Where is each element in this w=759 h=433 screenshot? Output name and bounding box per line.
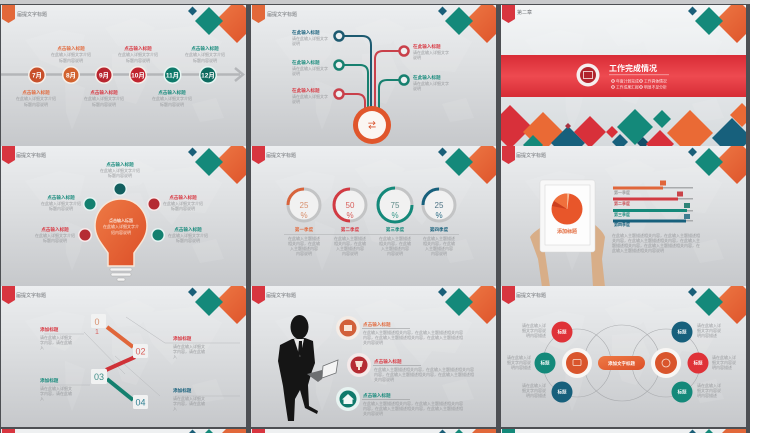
node text: 请在此输入详	[507, 354, 531, 360]
icon labels: 点击输入标题	[47, 194, 75, 201]
step labels: 请在此输入详细文	[40, 334, 72, 340]
step numbers: 04	[135, 398, 146, 408]
month nodes: 12月	[201, 72, 215, 80]
month nodes: 8月	[66, 72, 76, 80]
description: 题描述相关内容，在此输入主题描述相关内容，在	[612, 242, 700, 248]
branch labels: 请在此输入详细文字	[292, 65, 328, 71]
step labels: 请在此输入详细文	[173, 343, 205, 349]
bar labels: 第四季度	[614, 221, 630, 227]
percentages: 25	[300, 201, 309, 210]
step numbers: 1	[95, 329, 99, 336]
slide title: 届提文字标题	[17, 11, 47, 18]
heading rule	[609, 74, 669, 76]
bulb text: 绍内容说明	[111, 229, 131, 235]
cropped bottom row slide 1	[1, 429, 246, 433]
section bullets: 年度计划完成	[616, 78, 639, 84]
icon labels: 在此输入详细文字介绍	[100, 167, 140, 173]
icon labels: 点击输入标题	[174, 226, 202, 233]
branch labels: 在此输入标题	[292, 59, 320, 66]
progress bars	[613, 186, 693, 222]
step numbers: 02	[135, 346, 146, 356]
timeline arrow	[1, 68, 243, 81]
ribbons	[106, 327, 135, 400]
slide 2: branching tree	[251, 0, 509, 146]
icon labels: 在此输入详细文字介绍	[35, 232, 75, 238]
step labels: 入	[40, 345, 44, 350]
description: 关内容，在此输入主题描述相关内容，在此输入主	[612, 237, 700, 243]
light bulb	[95, 199, 147, 281]
icon labels: 标题内容说明	[49, 205, 73, 211]
header badge	[2, 146, 15, 164]
quarter text: 入主题描述内容	[425, 245, 453, 251]
icon labels: 点击输入标题	[41, 226, 69, 233]
branch labels: 请在此输入详细文字	[413, 49, 449, 55]
node text: 请在此输入详	[522, 382, 546, 388]
bulb text: 点击输入标题	[109, 217, 133, 223]
slide 7: zigzag steps	[1, 280, 259, 427]
timeline labels: 点击输入标题	[22, 89, 50, 96]
icon labels	[35, 161, 208, 243]
quarter headings: 第二季度	[341, 226, 360, 233]
slide 5: quarterly rings	[251, 140, 509, 287]
heading rule	[284, 234, 459, 235]
node text: 请在此输入详	[712, 354, 736, 360]
businessman silhouette	[278, 315, 338, 421]
cropped bottom row slide 2	[251, 429, 496, 433]
header badge	[252, 286, 265, 304]
bar labels	[614, 189, 630, 227]
bar labels: 第一季度	[614, 189, 630, 195]
header badge	[252, 146, 265, 164]
timeline labels: 标题内容说明	[24, 101, 48, 107]
slide 3: section divider	[501, 5, 746, 146]
orbit rings	[543, 325, 700, 401]
node text	[507, 322, 736, 398]
item text: 点击输入标题	[374, 358, 402, 365]
bar labels: 第三季度	[614, 211, 630, 217]
description: 在此输入主题描述相关内容，在此输入主题描述相	[612, 232, 700, 238]
timeline labels	[16, 45, 225, 107]
progress rings	[288, 188, 455, 222]
month nodes	[28, 66, 217, 84]
slide title: 届提文字标题	[16, 152, 46, 159]
node text: 明内容描述	[526, 332, 546, 338]
timeline labels: 标题内容说明	[193, 57, 217, 63]
quarter text: 在此输入主题描述	[379, 235, 411, 241]
item text: 关内容说明	[363, 339, 383, 345]
bar value tags	[660, 180, 690, 219]
percentages: 50	[346, 201, 355, 210]
timeline labels: 在此输入详细文字介绍	[185, 51, 225, 57]
item text: 内容，在此输入主题描述相关内容，在此输入主题描述相	[363, 405, 463, 411]
percentages: 25	[435, 201, 444, 210]
branch labels: 在此输入标题	[292, 87, 320, 94]
connector lines	[40, 317, 240, 396]
node text: 细文字内容说	[697, 387, 721, 393]
branch nodes	[334, 32, 408, 98]
inner hubs	[562, 348, 681, 378]
step labels: 字内容，请在此输	[40, 339, 72, 345]
quarter text: 在此输入主题描述	[334, 235, 366, 241]
slide 8: businessman	[251, 280, 509, 427]
branch lines	[344, 35, 398, 108]
node text: 请在此输入详	[697, 322, 721, 328]
branch labels: 请在此输入详细文字	[413, 80, 449, 86]
icon labels: 在此输入详细文字介绍	[168, 232, 208, 238]
timeline labels: 在此输入详细文字介绍	[118, 51, 158, 57]
bottom diamond pattern	[501, 103, 746, 146]
item text	[362, 321, 474, 416]
icon labels: 标题内容说明	[108, 172, 132, 178]
percentages: %	[435, 211, 443, 220]
header badge	[2, 286, 15, 304]
item text: 关内容说明	[374, 376, 394, 382]
node text: 请在此输入详	[697, 382, 721, 388]
step labels: 字内容，请在此输	[173, 348, 205, 354]
icon labels: 在此输入详细文字介绍	[163, 200, 203, 206]
timeline labels: 点击输入标题	[57, 45, 85, 52]
slide title: 届提文字标题	[266, 292, 296, 299]
branch labels: 在此输入标题	[292, 29, 320, 36]
branch labels: 说明	[292, 40, 300, 46]
branch labels: 说明	[292, 98, 300, 104]
icon labels: 在此输入详细文字介绍	[41, 200, 81, 206]
icon badges	[336, 316, 371, 411]
step labels	[40, 326, 205, 411]
slide title: 届提文字标题	[516, 292, 546, 299]
percentages: %	[300, 211, 308, 220]
branch labels: 请在此输入详细文字	[292, 35, 328, 41]
quarter headings: 第四季度	[430, 226, 449, 233]
item text: 点击输入标题	[363, 392, 391, 399]
section icon	[576, 64, 600, 86]
item text: 关内容说明	[363, 410, 383, 416]
cropped bottom row slide 3	[501, 429, 746, 433]
timeline labels: 在此输入详细文字介绍	[16, 95, 56, 101]
month nodes: 9月	[99, 72, 109, 80]
tablet	[540, 180, 595, 252]
quarter text: 内容说明	[387, 250, 403, 256]
outer nodes: 标题	[678, 328, 687, 336]
timeline labels: 点击输入标题	[158, 89, 186, 96]
bulb text	[103, 217, 139, 235]
percentages: %	[346, 211, 354, 220]
icon labels: 标题内容说明	[171, 205, 195, 211]
quarter text: 入主题描述内容	[290, 245, 318, 251]
node text: 细文字内容说	[507, 359, 531, 365]
section bullets: 工作成果汇报	[616, 84, 639, 90]
timeline labels: 点击输入标题	[191, 45, 219, 52]
item text: 点击输入标题	[363, 321, 391, 328]
outer nodes: 标题	[678, 388, 687, 396]
step labels: 入	[173, 354, 177, 359]
slide 1: timeline	[1, 0, 259, 146]
step labels: 添加标题	[40, 377, 59, 384]
quarter text	[288, 235, 455, 256]
node text: 明内容描述	[526, 392, 546, 398]
branch labels: 在此输入标题	[413, 43, 441, 50]
header badge	[502, 5, 515, 23]
section bullets	[612, 78, 667, 90]
node text: 明内容描述	[697, 332, 717, 338]
step labels: 添加标题	[173, 335, 192, 342]
quarter text: 相关内容，在此输	[423, 240, 455, 246]
slide 9: hub diagram	[501, 280, 759, 427]
month nodes: 10月	[131, 72, 145, 80]
timeline labels: 点击输入标题	[124, 45, 152, 52]
central hub icon: ⇄	[368, 120, 376, 130]
node text: 细文字内容说	[712, 359, 736, 365]
center pill	[598, 356, 645, 370]
chart label: 添加标题	[557, 228, 577, 235]
quarter headings: 第一季度	[295, 226, 314, 233]
branch labels: 说明	[292, 70, 300, 76]
percentages	[300, 202, 444, 218]
icon labels: 标题内容说明	[43, 237, 67, 243]
hands	[530, 223, 605, 287]
header badge	[2, 5, 15, 23]
section bullets: 明显不足分析	[644, 84, 667, 90]
icon labels: 点击输入标题	[169, 194, 197, 201]
branch labels: 在此输入标题	[413, 74, 441, 81]
month nodes: 11月	[166, 72, 179, 80]
timeline labels: 标题内容说明	[160, 101, 184, 107]
node text: 细文字内容说	[697, 327, 721, 333]
timeline labels: 标题内容说明	[92, 101, 116, 107]
slide 4: light bulb	[1, 140, 259, 287]
step numbers: 0	[94, 317, 100, 327]
center pill: 添加文字标题	[608, 360, 635, 367]
item text: 在此输入主题描述相关内容，在此输入主题描述相关内容	[363, 329, 463, 335]
outer nodes: 标题	[558, 328, 567, 336]
slide 6: tablet chart	[501, 140, 759, 287]
branch labels	[292, 29, 449, 104]
icon labels: 点击输入标题	[106, 161, 134, 168]
quarter headings: 第三季度	[386, 226, 405, 233]
description	[612, 232, 700, 253]
month nodes: 7月	[32, 72, 42, 80]
item text: 内容，在此输入主题描述相关内容，在此输入主题描述相	[374, 371, 474, 377]
outer nodes: 标题	[558, 388, 567, 396]
quarter text: 在此输入主题描述	[423, 235, 455, 241]
timeline labels: 在此输入详细文字介绍	[152, 95, 192, 101]
slide title: 届提文字标题	[267, 11, 297, 18]
header badge	[502, 286, 515, 304]
timeline labels: 在此输入详细文字介绍	[84, 95, 124, 101]
branch labels: 说明	[413, 85, 421, 91]
header badge	[252, 5, 265, 23]
node text: 细文字内容说	[522, 327, 546, 333]
quarter text: 在此输入主题描述	[288, 235, 320, 241]
step labels: 入	[40, 396, 44, 401]
quarter text: 入主题描述内容	[381, 245, 409, 251]
step boxes	[91, 314, 148, 409]
outer nodes: 标题	[694, 360, 703, 366]
step labels: 请在此输入详细文	[173, 395, 205, 401]
pie chart	[552, 194, 582, 224]
node text: 明内容描述	[511, 364, 531, 370]
step labels: 添加标题	[40, 326, 59, 333]
percentages: %	[391, 211, 399, 220]
header badge	[502, 146, 515, 164]
outer nodes: 标题	[540, 360, 550, 366]
section bullets: 工作具体情况	[644, 78, 667, 84]
node text: 明内容描述	[712, 364, 732, 370]
item text: 内容，在此输入主题描述相关内容，在此输入主题描述相	[363, 334, 463, 340]
step labels: 添加标题	[173, 387, 192, 394]
node text: 请在此输入详	[522, 322, 546, 328]
top strip of previous row	[0, 0, 750, 4]
slide title: 届提文字标题	[516, 152, 546, 159]
node text: 细文字内容说	[522, 387, 546, 393]
quarter text: 内容说明	[431, 250, 447, 256]
quarter text: 内容说明	[342, 250, 358, 256]
step labels: 字内容，请在此输	[173, 400, 205, 406]
timeline labels: 在此输入详细文字介绍	[51, 51, 91, 57]
step labels: 请在此输入详细文	[40, 385, 72, 391]
surrounding icons	[78, 182, 165, 242]
icon labels: 标题内容说明	[176, 237, 200, 243]
branch labels: 说明	[413, 54, 421, 60]
item text: 在此输入主题描述相关内容，在此输入主题描述相关内容	[374, 366, 474, 372]
step labels: 入	[173, 406, 177, 411]
bar labels: 第二季度	[614, 200, 630, 206]
quarter headings	[295, 226, 448, 232]
step numbers	[94, 317, 146, 408]
step numbers: 03	[94, 372, 104, 382]
item text: 在此输入主题描述相关内容，在此输入主题描述相关内容	[363, 400, 463, 406]
quarter text: 相关内容，在此输	[379, 240, 411, 246]
central hub icon	[353, 106, 391, 144]
timeline labels: 标题内容说明	[126, 57, 150, 63]
slide title: 届提文字标题	[16, 292, 46, 299]
quarter text: 相关内容，在此输	[288, 240, 320, 246]
quarter text: 入主题描述内容	[336, 245, 364, 251]
bulb text: 在此输入详细文字介	[103, 223, 139, 229]
timeline labels: 点击输入标题	[90, 89, 118, 96]
section heading: 工作完成情况	[609, 63, 657, 73]
timeline labels: 标题内容说明	[59, 57, 83, 63]
quarter text: 相关内容，在此输	[334, 240, 366, 246]
step labels: 字内容，请在此输	[40, 390, 72, 396]
branch labels: 请在此输入详细文字	[292, 93, 328, 99]
red title band	[501, 55, 746, 97]
section number: 第二章	[517, 9, 532, 16]
outer nodes	[534, 322, 708, 402]
percentages: 75	[391, 201, 400, 210]
quarter text: 内容说明	[296, 250, 312, 256]
description: 此输入主题描述相关内容说明	[612, 247, 664, 253]
slide title: 届提文字标题	[266, 152, 296, 159]
node text: 明内容描述	[697, 392, 717, 398]
